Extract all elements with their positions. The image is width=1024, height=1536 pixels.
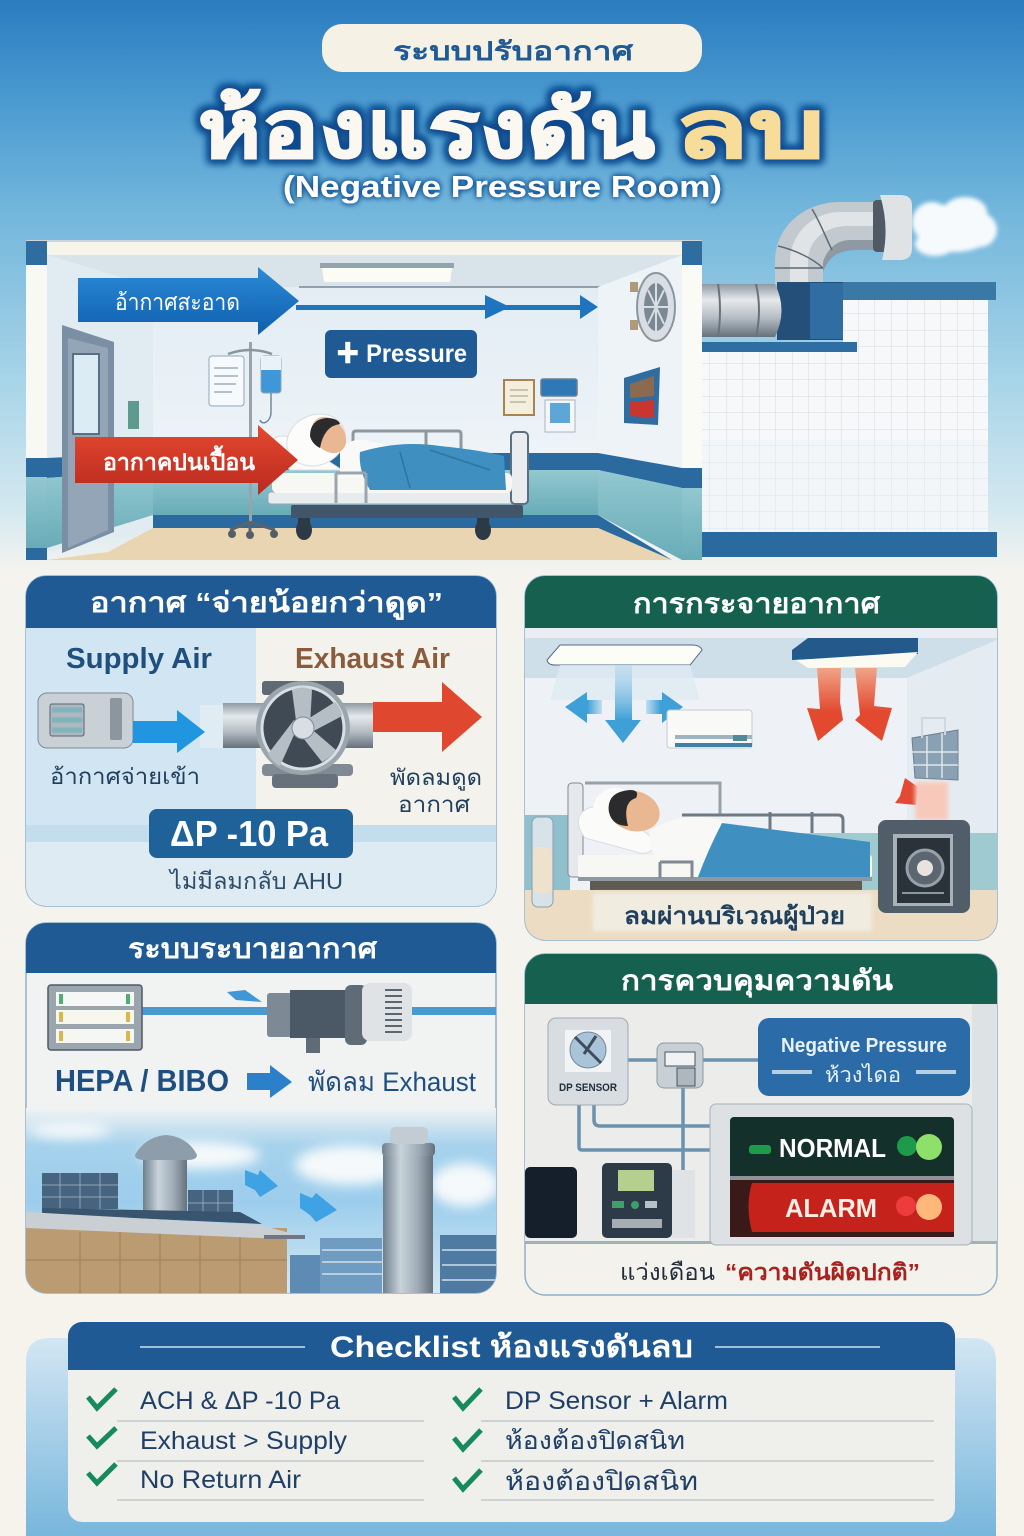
checklist item: Exhaust > Supply xyxy=(140,1427,348,1455)
device: controller xyxy=(602,1163,695,1238)
normal row xyxy=(749,1133,942,1163)
bed with patient xyxy=(532,783,872,907)
panel header xyxy=(26,923,496,973)
icon: iv stand xyxy=(209,342,281,539)
top beam xyxy=(26,240,702,255)
city xyxy=(290,1235,496,1295)
arrow: contaminated air xyxy=(75,425,298,495)
hero: building exterior with duct xyxy=(702,195,997,557)
caption xyxy=(593,893,872,931)
gown xyxy=(340,440,392,478)
arrow: supply xyxy=(133,710,205,753)
black cabinet xyxy=(525,1167,577,1238)
heading: ระบบระบายอากาศ xyxy=(128,933,378,964)
caption xyxy=(620,1259,920,1285)
panel: pressure control xyxy=(525,954,997,1295)
checklist item: ACH & ΔP -10 Pa xyxy=(140,1387,340,1415)
wiring xyxy=(579,1060,758,1170)
wainscot xyxy=(525,815,570,890)
delta P badge: ΔP -10 Pa xyxy=(170,813,329,854)
checklist item: No Return Air xyxy=(140,1466,301,1494)
arrows: exhaust flow xyxy=(807,668,918,805)
pillow xyxy=(272,436,342,470)
gown xyxy=(650,817,725,857)
arrows: supply diffusion xyxy=(565,665,683,743)
text: exhaust caption: พัดลมดูด xyxy=(390,765,482,791)
text: exhaust caption: อากาศ xyxy=(398,792,470,817)
elbow exhaust pipe xyxy=(775,195,912,285)
subtitle: (Negative Pressure Room) xyxy=(283,169,722,204)
panel header xyxy=(525,576,997,628)
caption: “ความดันผิดปกติ” xyxy=(725,1259,920,1285)
rooftop vent xyxy=(135,1135,197,1218)
duct sill xyxy=(702,342,857,352)
hero: room cutaway xyxy=(26,240,702,560)
checklist item: DP Sensor + Alarm xyxy=(505,1387,728,1415)
left column xyxy=(26,265,47,458)
solar panels xyxy=(42,1173,233,1212)
panel: checklist xyxy=(26,1322,996,1536)
icon: HEPA filter xyxy=(48,985,142,1050)
checklist item: ห้องต้องปิดสนิท xyxy=(505,1466,698,1496)
heading: การกระจายอากาศ xyxy=(633,588,881,619)
checklist header xyxy=(68,1322,955,1370)
icon: exhaust blower xyxy=(267,983,412,1053)
text: HEPA BIBO: HEPA / BIBO xyxy=(55,1063,229,1098)
status panel xyxy=(710,1104,972,1245)
checklist header: Checklist ห้องแรงดันลบ xyxy=(330,1331,693,1364)
text: exhaust fan: พัดลม Exhaust xyxy=(308,1067,476,1097)
heading: อากาศ “จ่ายน้อยกว่าดูด” xyxy=(90,587,443,620)
text: supply caption: อ้ากาศจ่ายเข้า xyxy=(50,764,200,789)
bed with patient xyxy=(268,405,528,540)
arrow: contaminated air: อากาคปนเปื้อน xyxy=(103,445,255,475)
panel header xyxy=(525,954,997,1004)
icon: AHU unit xyxy=(38,693,133,748)
heading: การควบคุมความดัน xyxy=(621,965,893,998)
top label pill: ระบบปรับอากาศ xyxy=(393,36,634,66)
caption: ลมผ่านบริเวณผู้ป่วย xyxy=(624,903,845,931)
exhaust fan on wall xyxy=(630,273,675,341)
checklist item: ห้องต้องปิดสนิท xyxy=(505,1427,685,1455)
airflow haze xyxy=(550,665,700,700)
right wall xyxy=(598,255,682,560)
duct line xyxy=(142,1007,496,1015)
title: ห้องแรงดัน xyxy=(198,85,655,174)
arrow: clean air: อ้ากาศสะอาด xyxy=(115,289,240,315)
panel header xyxy=(26,576,496,628)
door xyxy=(62,325,139,553)
left wall xyxy=(47,255,153,552)
text: exhaust caption xyxy=(390,765,482,817)
ceiling xyxy=(47,255,682,287)
alarm row: ALARM xyxy=(785,1193,877,1223)
airflow haze xyxy=(200,705,225,748)
title: ลบ xyxy=(675,85,825,174)
blanket xyxy=(360,444,506,490)
icon: exhaust fan xyxy=(223,681,373,788)
head xyxy=(305,410,353,460)
label: negative pressure xyxy=(758,1018,970,1096)
sky scene xyxy=(26,1108,496,1295)
wall grille xyxy=(912,718,958,780)
label: negative pressure: Negative Pressure xyxy=(781,1035,947,1057)
top label pill xyxy=(322,24,702,72)
checklist item xyxy=(88,1464,301,1494)
back wall xyxy=(118,287,598,528)
normal row: NORMAL xyxy=(779,1133,886,1163)
label: exhaust air: Exhaust Air xyxy=(295,643,450,675)
head xyxy=(604,785,664,837)
icon: relay xyxy=(657,1043,703,1088)
icon: DP sensor xyxy=(548,1018,628,1105)
pressure sign xyxy=(325,330,477,378)
caption: แว่งเดือน xyxy=(620,1259,715,1285)
base band xyxy=(702,532,997,557)
pillow xyxy=(578,807,655,853)
wall of tiles xyxy=(702,352,988,532)
dark duct housing xyxy=(777,282,843,340)
panel: exhaust system xyxy=(26,923,500,1295)
frames on wall xyxy=(504,367,660,432)
blanket xyxy=(698,823,870,877)
checklist backdrop xyxy=(26,1338,996,1536)
title xyxy=(198,85,825,174)
thin airflow arrow xyxy=(296,295,598,319)
right column xyxy=(682,265,702,468)
icon: air conditioner xyxy=(667,710,752,748)
label: negative pressure: ห้วงไดอ xyxy=(825,1063,901,1087)
building xyxy=(26,1228,287,1295)
wainscot xyxy=(118,453,598,470)
icon: cloud xyxy=(912,197,997,256)
label: supply air: Supply Air xyxy=(66,643,212,675)
arrow: clean air xyxy=(78,267,299,335)
horizontal duct xyxy=(702,284,782,337)
panel: air distribution xyxy=(525,576,997,940)
arrow: to fan xyxy=(247,1065,292,1098)
wheels xyxy=(296,516,491,540)
ceiling light xyxy=(320,263,454,282)
panel: air balance xyxy=(26,576,496,906)
exhaust grille device xyxy=(878,782,970,913)
ceiling lamps xyxy=(547,638,918,668)
checklist card xyxy=(68,1322,955,1522)
icon: DP sensor: DP SENSOR xyxy=(559,1082,617,1094)
arrow: small flow xyxy=(227,990,262,1002)
top blue band xyxy=(843,282,996,300)
tower xyxy=(382,1127,435,1295)
pressure sign: ✚ Pressure xyxy=(336,340,467,368)
alarm row xyxy=(748,1183,954,1232)
delta P badge xyxy=(149,809,353,858)
arrows: outdoor flow xyxy=(245,1170,337,1222)
text: no return air: ไม่มีลมกลับ AHU xyxy=(168,868,343,894)
floor xyxy=(47,528,672,560)
arrow: exhaust xyxy=(373,682,482,752)
